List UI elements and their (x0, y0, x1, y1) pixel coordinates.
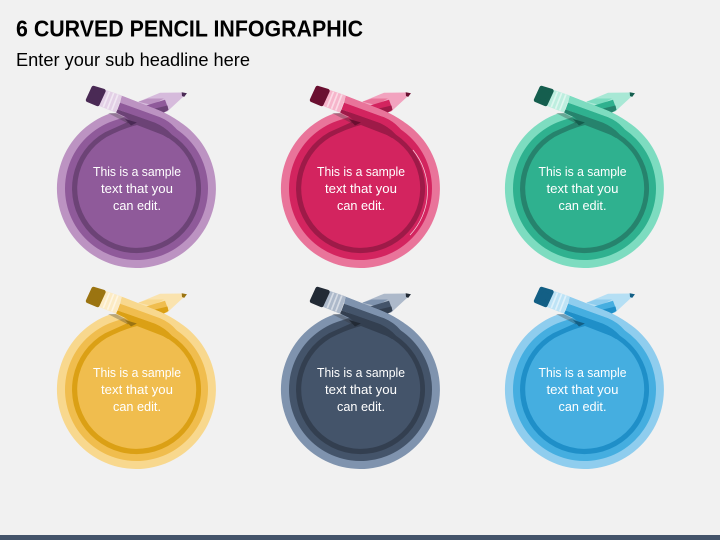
icon: green pencil body (536, 88, 628, 138)
green text block (538, 164, 626, 213)
purple circle rings (57, 96, 216, 268)
navy text block: This is a sample (317, 365, 405, 380)
icon: navy pencil tip (362, 293, 411, 314)
green circle rings (505, 96, 664, 268)
panel: pink pencil circle (281, 88, 440, 268)
icon: blue pencil tip (586, 293, 635, 314)
icon: yellow pencil tip (138, 293, 187, 314)
icon: pink pencil body (312, 88, 404, 138)
purple text block: text that you (101, 181, 173, 196)
pink circle rings (281, 96, 440, 268)
green text block: can edit. (558, 198, 606, 213)
pink ring highlight (410, 150, 428, 235)
panel: blue pencil circle (505, 289, 664, 469)
panel: navy pencil circle (281, 289, 440, 469)
panel: purple pencil circle (57, 88, 216, 268)
blue circle rings (505, 297, 664, 469)
navy text block: can edit. (337, 399, 385, 414)
yellow text block (93, 365, 181, 414)
navy text block: text that you (325, 382, 397, 397)
navy text block (317, 365, 405, 414)
title: 6 CURVED PENCIL INFOGRAPHIC (16, 16, 363, 42)
blue text block: can edit. (558, 399, 606, 414)
purple text block: This is a sample (93, 164, 181, 179)
purple text block (93, 164, 181, 213)
yellow text block: text that you (101, 382, 173, 397)
pink text block (317, 164, 405, 213)
pink text block: This is a sample (317, 164, 405, 179)
icon: purple pencil body (88, 88, 180, 138)
yellow circle rings (57, 297, 216, 469)
icon: green pencil tip (586, 92, 635, 113)
icon: blue pencil body (536, 289, 628, 339)
icon: pink pencil tip (362, 92, 411, 113)
subtitle: Enter your sub headline here (16, 50, 250, 70)
yellow text block: can edit. (113, 399, 161, 414)
green text block: This is a sample (538, 164, 626, 179)
green text block: text that you (546, 181, 618, 196)
pink text block: text that you (325, 181, 397, 196)
yellow text block: This is a sample (93, 365, 181, 380)
panel: green pencil circle (505, 88, 664, 268)
pink text block: can edit. (337, 198, 385, 213)
panel: yellow pencil circle (57, 289, 216, 469)
icon: purple pencil tip (138, 92, 187, 113)
blue text block: text that you (546, 382, 618, 397)
blue text block: This is a sample (538, 365, 626, 380)
navy circle rings (281, 297, 440, 469)
footer bar (0, 535, 720, 540)
icon: navy pencil body (312, 289, 404, 339)
purple text block: can edit. (113, 198, 161, 213)
blue text block (538, 365, 626, 414)
icon: yellow pencil body (88, 289, 180, 339)
